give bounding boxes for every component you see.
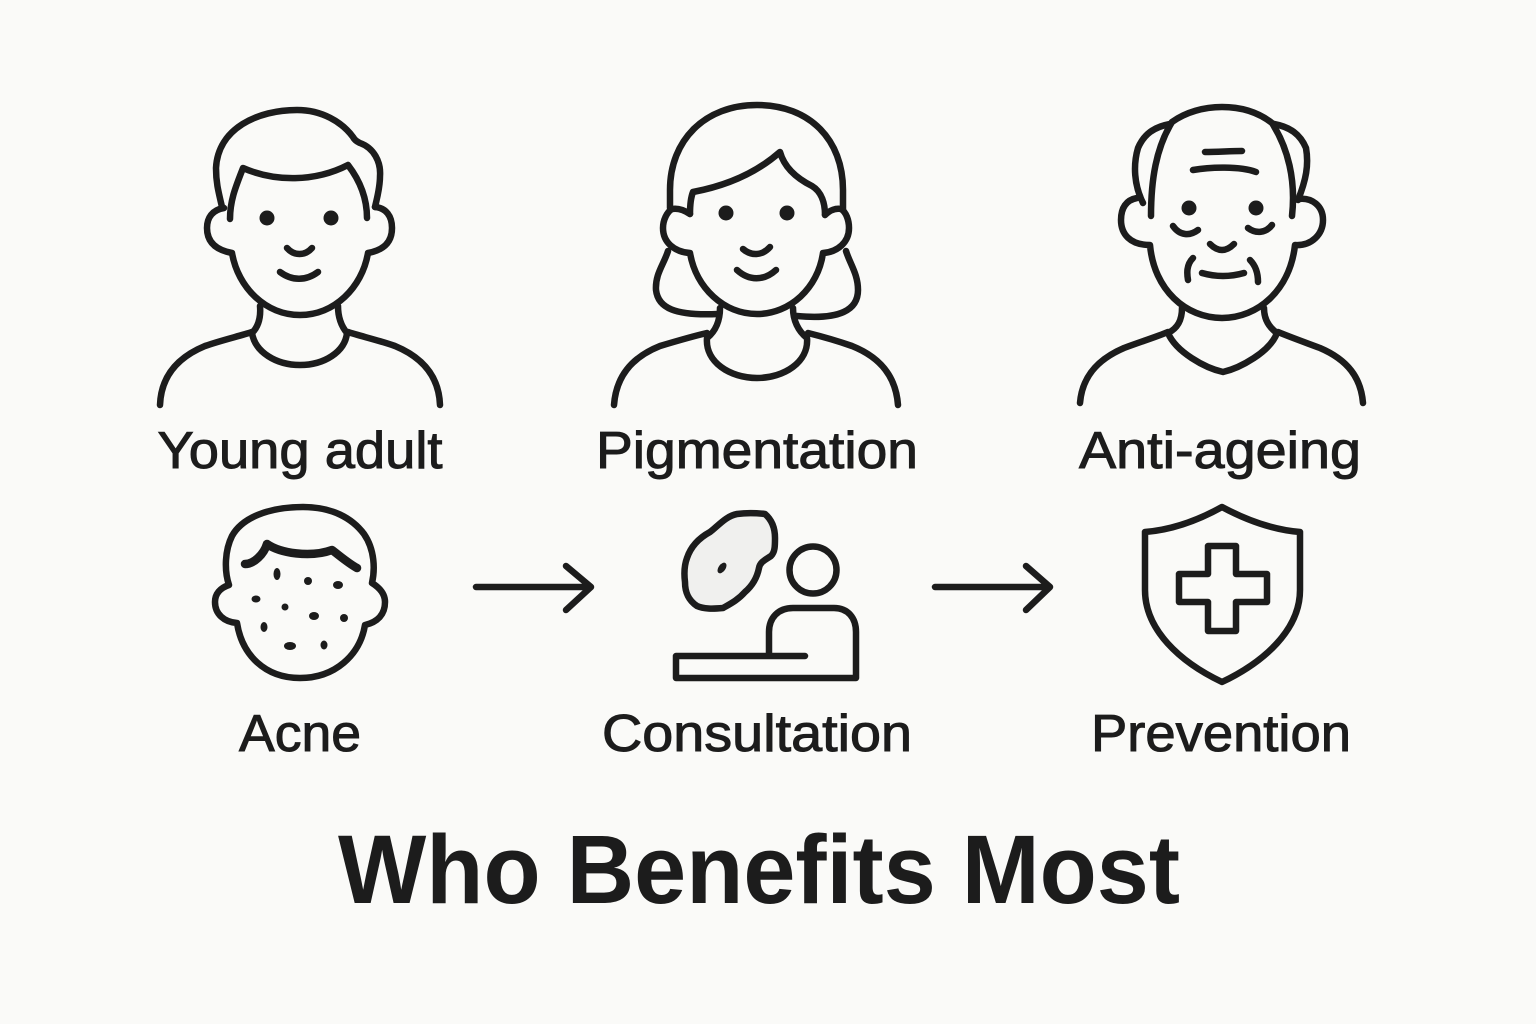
title: Who Benefits Most (338, 815, 1180, 924)
icon: shield with cross (1145, 507, 1300, 682)
arrow: acne to consultation (476, 566, 591, 610)
label: anti-ageing: Anti-ageing (1079, 422, 1361, 480)
label: prevention: Prevention (1091, 705, 1351, 763)
icon: woman with pigmentation (614, 105, 898, 405)
icon: young adult (160, 110, 440, 405)
arrow: consultation to prevention (935, 566, 1050, 610)
icon: older man (1080, 107, 1363, 403)
label: pigmentation: Pigmentation (596, 422, 918, 480)
label: young adult: Young adult (158, 422, 443, 480)
icon: consultation (676, 513, 856, 678)
icon: acne face (215, 507, 385, 678)
label: acne: Acne (239, 705, 361, 763)
label: consultation: Consultation (602, 705, 912, 763)
